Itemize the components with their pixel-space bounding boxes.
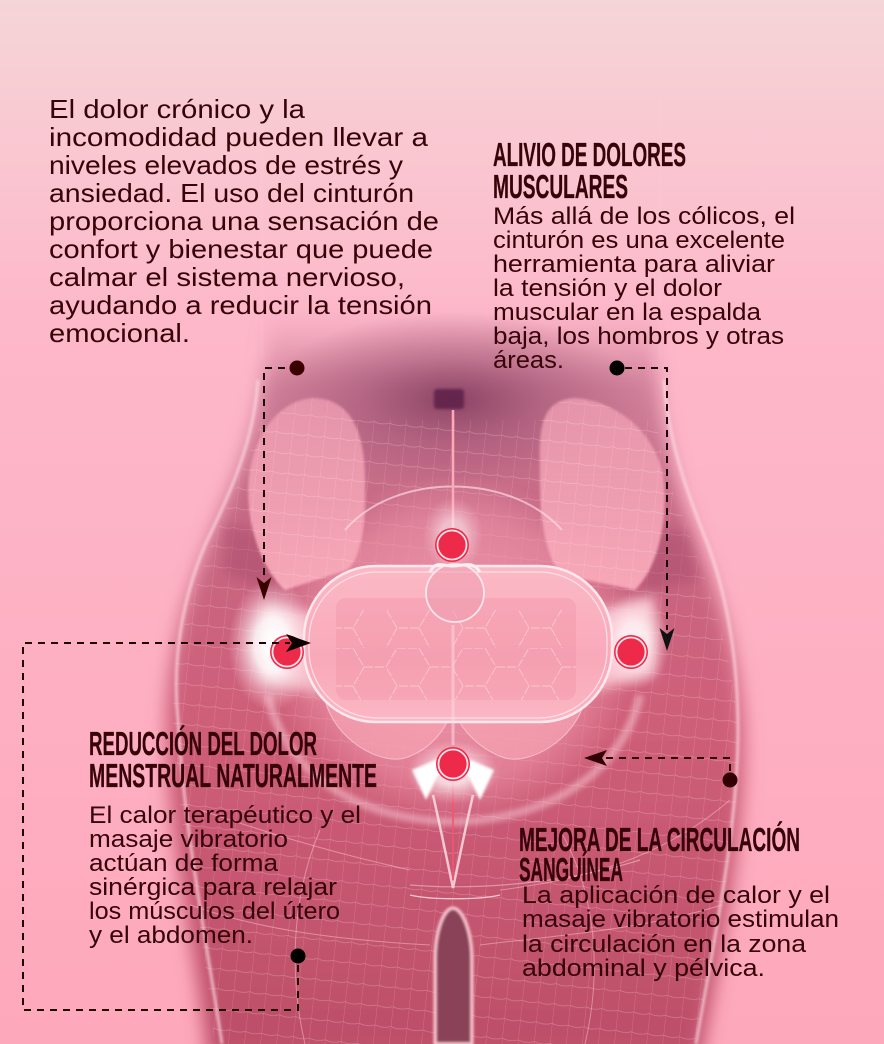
body: circulación: La aplicación de calor y el bbox=[522, 882, 830, 909]
hexagon circuit bbox=[336, 610, 576, 700]
text block: stress intro: ansiedad. El uso del cinturón bbox=[49, 178, 414, 208]
text block: stress intro: proporciona una sensación de bbox=[49, 206, 439, 236]
left hip panel bbox=[248, 398, 365, 590]
heading: alivio bbox=[493, 136, 686, 205]
text block: stress intro: niveles elevados de estrés y bbox=[49, 150, 403, 180]
arrow: top left connector bbox=[256, 360, 304, 600]
text block: menstrual pain reduction bbox=[89, 725, 377, 949]
leg gap bbox=[435, 908, 472, 1044]
belt control dial bbox=[426, 564, 484, 622]
body: alivio: la tensión y el dolor bbox=[493, 275, 722, 302]
body: reducción: actúan de forma bbox=[89, 850, 279, 877]
body: alivio: áreas. bbox=[493, 347, 564, 374]
text block: stress intro: emocional. bbox=[49, 318, 190, 348]
text block: stress intro bbox=[49, 94, 439, 348]
heading: reducción: MENSTRUAL NATURALMENTE bbox=[89, 757, 377, 794]
heading: reducción bbox=[89, 725, 377, 794]
left hip mesh bbox=[248, 398, 365, 590]
text block: stress intro: ayudando a reducir la tensión bbox=[49, 290, 432, 320]
right hip panel bbox=[540, 398, 665, 590]
right side strap bbox=[595, 595, 655, 690]
lower midline structure bbox=[410, 780, 500, 899]
body illustration bbox=[166, 100, 744, 1044]
circuit panel bbox=[336, 598, 576, 700]
abdominal arc bbox=[345, 486, 562, 530]
glow: top bbox=[423, 497, 483, 573]
belt body bbox=[304, 566, 612, 722]
text block: circulation bbox=[519, 821, 839, 982]
pelvic halo bbox=[268, 475, 638, 825]
right hip mesh bbox=[540, 398, 665, 590]
arrow: bottom right connector bbox=[584, 750, 738, 788]
navel shadow on belly bbox=[263, 312, 643, 488]
heading: alivio: MUSCULARES bbox=[493, 168, 628, 205]
text block: stress intro: calmar el sistema nervioso, bbox=[49, 262, 405, 292]
glow: bottom rays bbox=[412, 758, 494, 800]
body: alivio bbox=[493, 203, 795, 374]
body: alivio: herramienta para aliviar bbox=[493, 251, 775, 278]
left side strap bbox=[262, 605, 320, 695]
body: circulación bbox=[522, 882, 839, 982]
body: circulación: la circulación en la zona bbox=[522, 931, 807, 958]
body: reducción: y el abdomen. bbox=[89, 922, 253, 949]
body: reducción: los músculos del útero bbox=[89, 898, 340, 925]
belt device bbox=[304, 564, 612, 745]
hotspot: top bbox=[435, 528, 469, 562]
thigh mesh lines bbox=[190, 800, 730, 1044]
body: reducción: masaje vibratorio bbox=[89, 826, 288, 853]
midline from navel bbox=[452, 410, 454, 530]
body: circulación: masaje vibratorio estimulan bbox=[522, 906, 839, 933]
body: reducción bbox=[89, 802, 361, 949]
heading: reducción: REDUCCIÓN DEL DOLOR bbox=[89, 725, 317, 762]
body: alivio: muscular en la espalda bbox=[493, 299, 762, 326]
arrow: bottom left connector bbox=[23, 634, 311, 1010]
body: circulación: abdominal y pélvica. bbox=[522, 955, 765, 982]
body: alivio: Más allá de los cólicos, el bbox=[493, 203, 795, 230]
glow: left bbox=[228, 579, 316, 711]
hotspot: left bbox=[270, 635, 304, 669]
torso and thighs silhouette bbox=[166, 310, 744, 1044]
dial clasp bbox=[430, 564, 480, 572]
hotspot: right bbox=[614, 635, 648, 669]
outer pelvic arcs bbox=[268, 695, 640, 887]
glow: bottom halo bbox=[407, 740, 499, 804]
glow: right bbox=[598, 594, 670, 690]
text block: stress intro: confort y bienestar que puede bbox=[49, 234, 433, 264]
body: alivio: cinturón es una excelente bbox=[493, 227, 785, 254]
body: reducción: El calor terapéutico y el bbox=[89, 802, 361, 829]
text block: stress intro: El dolor crónico y la bbox=[49, 94, 306, 124]
hotspot: bottom bbox=[436, 747, 470, 781]
text block: stress intro: incomodidad pueden llevar a bbox=[49, 122, 429, 152]
belt inner outline bbox=[309, 572, 607, 718]
heading: circulación: SANGUÍNEA bbox=[519, 851, 623, 888]
lower petals bbox=[325, 700, 585, 759]
body: reducción: sinérgica para relajar bbox=[89, 874, 337, 901]
body edge highlights bbox=[176, 100, 738, 1044]
text block: muscle pain relief bbox=[493, 136, 795, 374]
body mesh bbox=[173, 420, 738, 1044]
right side shadow wedge bbox=[640, 530, 700, 595]
heading: circulación bbox=[519, 821, 800, 888]
left side shadow wedge bbox=[225, 525, 285, 595]
heading: alivio: ALIVIO DE DOLORES bbox=[493, 136, 686, 173]
navel bbox=[434, 389, 464, 409]
belt centre line bbox=[452, 625, 454, 745]
body: alivio: baja, los hombros y otras bbox=[493, 323, 784, 350]
arrow: top right connector bbox=[610, 360, 674, 651]
